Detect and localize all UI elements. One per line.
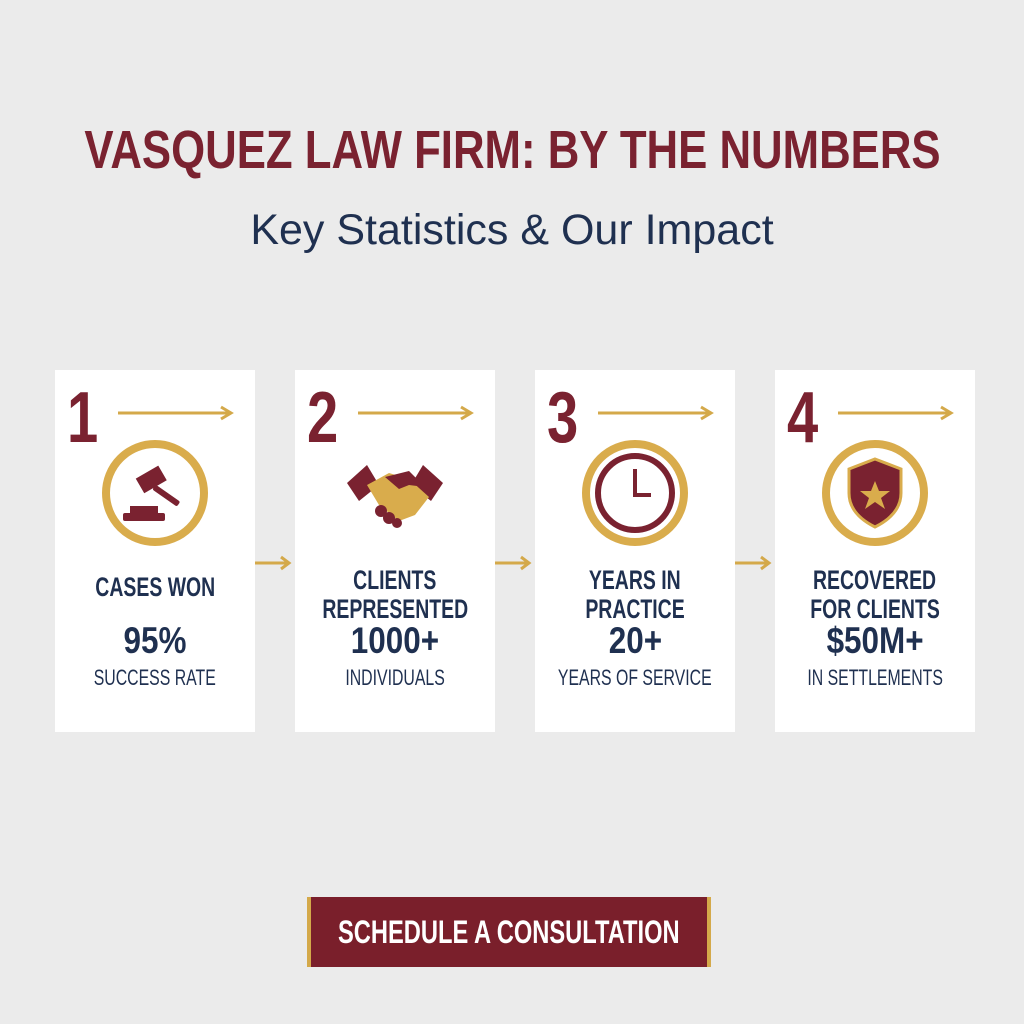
arrow between 3 and 4 — [735, 556, 772, 570]
icon: gavel — [102, 440, 208, 546]
subtext: IN SETTLEMENTS — [807, 665, 943, 690]
button: schedule — [307, 897, 711, 967]
stat: 20+ — [608, 620, 662, 661]
panel: cases won — [55, 370, 255, 732]
label — [810, 565, 940, 624]
panel: recovered — [775, 370, 975, 732]
label: CLIENTS — [353, 565, 437, 595]
subtext: SUCCESS RATE — [94, 665, 216, 690]
arrow — [118, 406, 234, 420]
icon: shield — [822, 440, 928, 546]
label: CASES WON — [95, 572, 215, 602]
arrow between 1 and 2 — [255, 556, 292, 570]
stat: $50M+ — [826, 620, 924, 661]
subtitle: Key Statistics & Our Impact — [250, 206, 774, 254]
arrow — [358, 406, 474, 420]
arrow — [598, 406, 714, 420]
panel: clients — [295, 370, 495, 732]
subtext: YEARS OF SERVICE — [558, 665, 712, 690]
label: FOR CLIENTS — [810, 594, 940, 624]
icon: clock — [582, 440, 688, 546]
number 1: 1 — [67, 378, 98, 458]
number 3: 3 — [547, 378, 578, 458]
number 2: 2 — [307, 378, 338, 458]
label: PRACTICE — [585, 594, 685, 624]
panel: years — [535, 370, 735, 732]
stat: 1000+ — [351, 620, 439, 661]
title: VASQUEZ LAW FIRM: BY THE NUMBERS — [84, 120, 940, 180]
subtext: INDIVIDUALS — [345, 665, 445, 690]
number 4: 4 — [787, 378, 818, 458]
label — [585, 565, 685, 624]
icon: handshake — [347, 465, 443, 528]
button: schedule: SCHEDULE A CONSULTATION — [338, 914, 680, 950]
label: YEARS IN — [589, 565, 681, 595]
label — [322, 565, 468, 624]
label: REPRESENTED — [322, 594, 468, 624]
arrow — [838, 406, 954, 420]
arrow between 2 and 3 — [495, 556, 532, 570]
label: RECOVERED — [813, 565, 937, 595]
stat: 95% — [124, 620, 186, 661]
